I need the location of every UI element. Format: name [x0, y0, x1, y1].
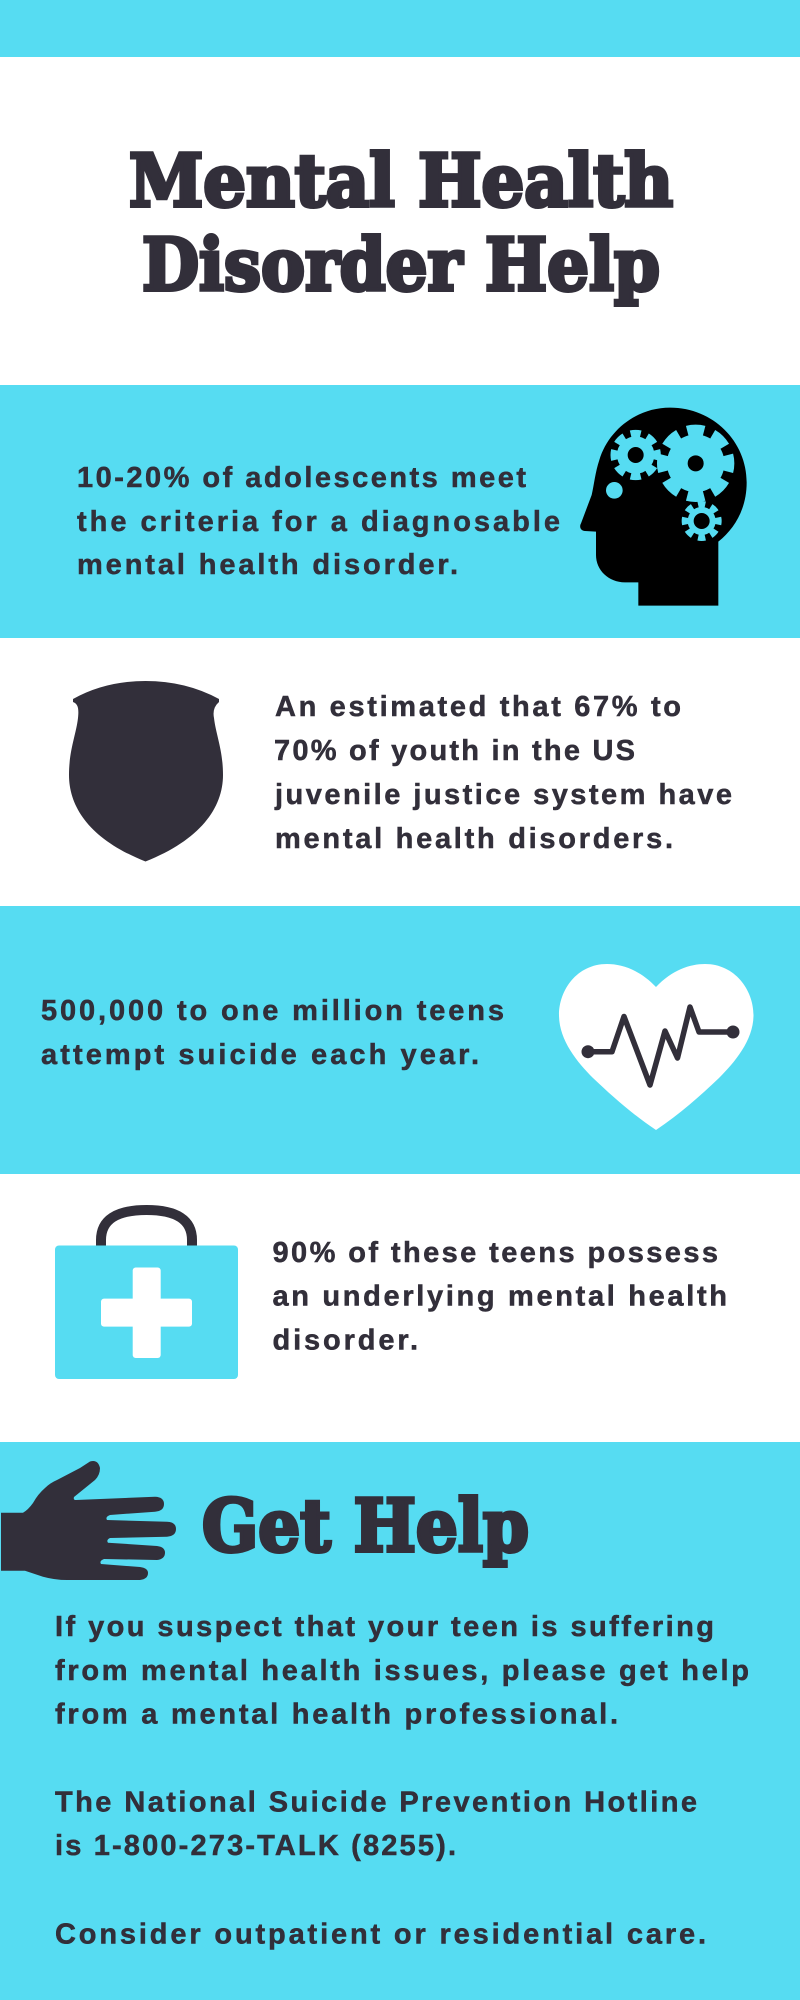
text: teen suicide statistic: 500,000 to one million teens	[41, 995, 504, 1027]
text: hotline: The National Suicide Prevention Hotline	[55, 1786, 697, 1818]
text: juvenile justice statistic: An estimated that 67% to	[275, 691, 681, 723]
heading: get help: Get Help	[202, 1483, 529, 1568]
text: get help advice: from a mental health professional.	[55, 1698, 618, 1730]
panel: juvenile justice statistic	[69, 681, 732, 862]
text: teen suicide statistic	[41, 995, 504, 1071]
icon: shield	[69, 681, 223, 862]
top band	[0, 0, 800, 57]
text: adolescents statistic: 10-20% of adolescents meet	[77, 462, 526, 494]
text: underlying disorder statistic: an underlying mental health	[272, 1280, 727, 1312]
text: juvenile justice statistic: juvenile justice system have	[274, 779, 732, 811]
text: get help advice	[55, 1611, 749, 1730]
text: adolescents statistic: the criteria for a diagnosable	[77, 506, 560, 538]
text: hotline: is 1-800-273-TALK (8255).	[55, 1830, 456, 1862]
panel: underlying disorder statistic	[55, 1210, 727, 1379]
text: hotline	[55, 1786, 697, 1862]
icon: head with gears	[580, 408, 747, 606]
text: underlying disorder statistic: disorder.	[272, 1324, 418, 1356]
text: juvenile justice statistic	[274, 691, 732, 855]
panel: teen suicide statistic	[0, 906, 800, 1174]
icon: open hand	[1, 1461, 176, 1580]
panel: adolescents statistic	[0, 385, 800, 638]
title: Mental Health	[129, 138, 673, 223]
text: adolescents statistic: mental health disorder.	[77, 549, 458, 581]
text: teen suicide statistic: attempt suicide each year.	[41, 1039, 479, 1071]
text: adolescents statistic	[77, 462, 560, 581]
text: get help advice: If you suspect that your teen is suffering	[55, 1611, 714, 1643]
title	[129, 138, 673, 307]
panel: get help	[0, 1442, 800, 2000]
text: underlying disorder statistic: 90% of these teens possess	[272, 1237, 718, 1269]
text: get help advice: from mental health issues, please get help	[55, 1655, 749, 1687]
text: juvenile justice statistic: mental health disorders.	[275, 823, 673, 855]
text: juvenile justice statistic: 70% of youth in the US	[274, 735, 635, 767]
text: underlying disorder statistic	[272, 1237, 727, 1356]
icon: heart with pulse line	[559, 964, 754, 1130]
icon: first aid kit	[55, 1210, 238, 1379]
title: Disorder Help	[142, 222, 660, 307]
text: care options: Consider outpatient or residential care.	[55, 1918, 706, 1950]
